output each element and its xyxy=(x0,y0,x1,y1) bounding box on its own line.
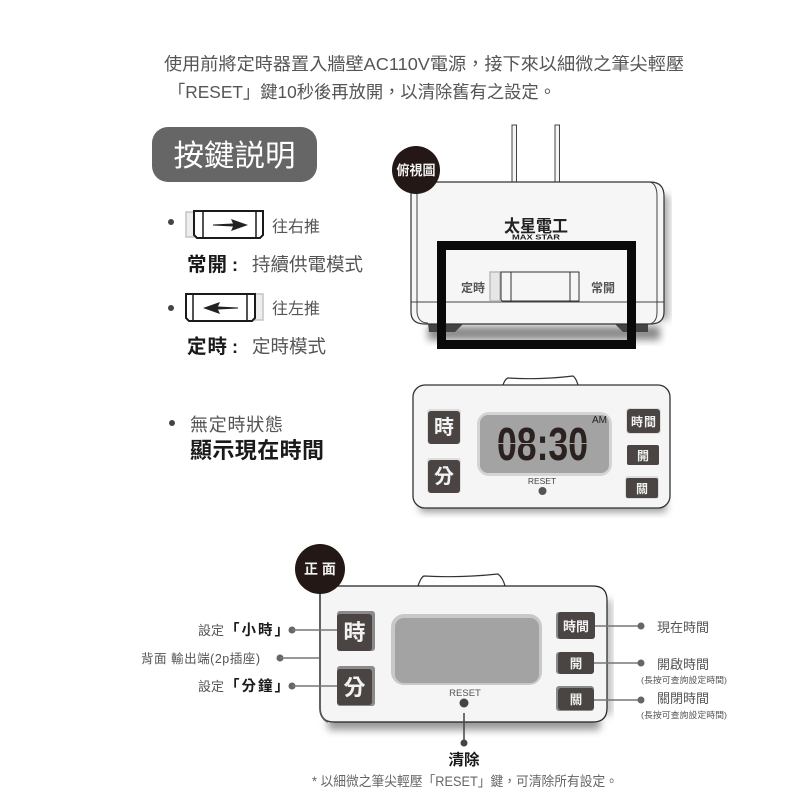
device feet xyxy=(428,323,648,332)
on button xyxy=(627,445,659,465)
device top view xyxy=(411,125,669,344)
callout: on time: 開啟時間 xyxy=(657,657,709,672)
slide switch xyxy=(490,272,579,302)
callout: off time xyxy=(594,691,727,720)
callout: set hour: 「小時」 xyxy=(225,622,289,639)
badge: top view xyxy=(392,146,440,194)
off button xyxy=(625,476,659,499)
callout: on time: (長按可查詢設定時間) xyxy=(641,675,727,685)
timer mode label xyxy=(187,335,326,358)
callout: set minute xyxy=(198,677,337,695)
device body xyxy=(411,182,664,324)
switch push left instruction: 往左推 xyxy=(272,300,320,318)
heading: button description: 按鍵説明 xyxy=(174,140,296,173)
badge: front: 正 面 xyxy=(304,561,336,577)
LCD screen: 08:30 xyxy=(497,418,588,470)
no timer status text xyxy=(169,415,324,463)
always-on mode label: : xyxy=(232,255,238,275)
front view device xyxy=(320,574,612,730)
footnote: * 以細微之筆尖輕壓「RESET」鍵，可清除所有設定。 xyxy=(312,774,618,789)
badge: top view: 俯視圖 xyxy=(396,162,436,178)
icon: switch pushed right xyxy=(186,211,263,238)
hour button: 時 xyxy=(434,416,454,439)
no timer status text: 顯示現在時間 xyxy=(190,438,324,463)
intro text xyxy=(164,54,684,102)
minute button: 分 xyxy=(343,675,366,700)
minute button xyxy=(337,666,375,706)
current time button: 時間 xyxy=(563,619,589,634)
off button: 關 xyxy=(636,482,648,496)
device top view: 定時 xyxy=(461,280,485,295)
callout: current time xyxy=(595,620,709,635)
minute button xyxy=(427,458,461,493)
callout: rear output socket xyxy=(141,651,319,666)
highlight frame xyxy=(442,246,632,344)
callout: on time xyxy=(594,657,727,685)
timer mode label: : xyxy=(232,337,238,357)
callout: reset clear: 清除 xyxy=(448,750,480,769)
device top view: 常開 xyxy=(591,281,615,295)
LCD screen xyxy=(477,412,612,476)
switch push right instruction xyxy=(168,211,320,238)
always-on mode label xyxy=(187,254,363,276)
intro text: 「RESET」鍵10秒後再放開，以清除舊有之設定。 xyxy=(168,82,556,102)
callout: set hour: 設定 xyxy=(198,623,224,638)
timer mode label: 定時 xyxy=(187,335,227,358)
current time button xyxy=(626,408,661,434)
switch push left instruction xyxy=(168,294,320,321)
intro text: 使用前將定時器置入牆壁AC110V電源，接下來以細微之筆尖輕壓 xyxy=(164,54,684,74)
heading: button description xyxy=(152,127,317,182)
always-on mode label: 常開 xyxy=(187,254,227,276)
current time button: 時間 xyxy=(631,414,656,429)
hour button xyxy=(427,409,461,444)
reset button xyxy=(449,688,481,708)
off button xyxy=(556,686,594,711)
callout: off time: 關閉時間 xyxy=(657,691,709,706)
minute button: 分 xyxy=(434,465,454,488)
callout: rear output socket: 背面 輸出端(2p插座) xyxy=(141,651,260,666)
brand logo: 太星電工 xyxy=(504,217,568,236)
clock display device xyxy=(413,376,670,512)
callout: off time: (長按可查詢設定時間) xyxy=(641,710,727,720)
plug pins xyxy=(512,125,560,183)
badge: front xyxy=(295,544,345,594)
on button: 開 xyxy=(570,657,582,671)
reset button: RESET xyxy=(449,688,481,699)
on button xyxy=(556,652,594,674)
icon: switch pushed left xyxy=(186,294,263,321)
LCD screen: AM xyxy=(592,415,607,426)
callout: current time: 現在時間 xyxy=(657,620,709,635)
always-on mode label: 持續供電模式 xyxy=(252,254,363,275)
timer mode label: 定時模式 xyxy=(252,336,326,357)
no timer status text: 無定時狀態 xyxy=(190,415,283,435)
callout: set minute: 「分鐘」 xyxy=(225,677,289,695)
reset button: RESET xyxy=(528,476,556,486)
LCD screen xyxy=(391,614,542,685)
on button: 開 xyxy=(637,449,649,463)
callout: reset clear xyxy=(448,713,480,769)
switch push right instruction: 往右推 xyxy=(272,218,320,236)
reset button xyxy=(528,476,556,495)
callout: set hour xyxy=(198,622,337,639)
off button: 關 xyxy=(570,693,582,707)
brand logo: MAX STAR xyxy=(512,234,560,242)
callout: set minute: 設定 xyxy=(198,679,224,694)
hour button xyxy=(337,611,375,651)
hour button: 時 xyxy=(343,620,366,645)
current time button xyxy=(556,612,595,639)
